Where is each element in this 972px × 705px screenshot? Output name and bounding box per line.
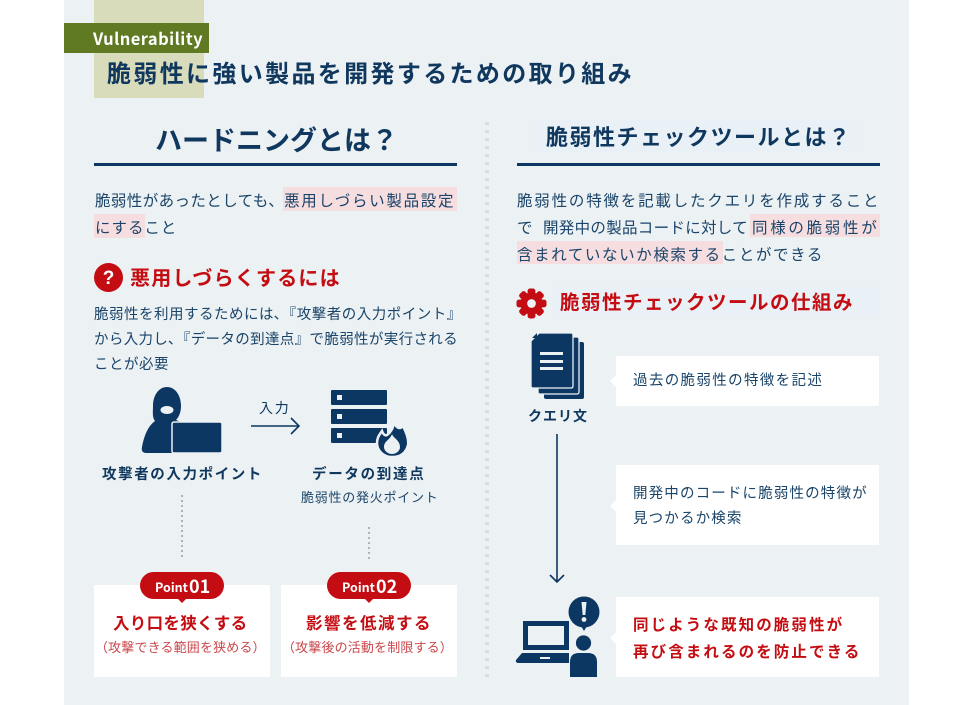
explanation text: 脆弱性を利用するためには､『攻撃者の入力ポイント』 — [94, 307, 462, 323]
arrow: query to result — [550, 434, 564, 584]
label: data destination: データの到達点 — [312, 467, 425, 483]
explanation text: ことが必要 — [94, 357, 169, 373]
subheading background — [552, 287, 879, 318]
caption: restrict post-attack activity: （攻撃後の活動を制限する） — [282, 640, 453, 655]
highlight: line two — [750, 214, 880, 237]
badge: point 02: 02 — [376, 573, 397, 599]
label: attacker input point: 攻撃者の入力ポイント — [102, 467, 263, 483]
arrow label: input: 入力 — [259, 400, 291, 416]
definition text: 含まれていないか検索することができる — [517, 247, 824, 264]
explanation text: から入力し､『データの到達点』で脆弱性が実行される — [94, 332, 458, 348]
definition text: 開発中の製品コードに対して — [543, 220, 748, 237]
badge: point 01: 01 — [189, 573, 210, 599]
heading: check tool: 脆弱性チェックツールとは？ — [546, 125, 852, 150]
subheading: how to make it hard to abuse: 悪用しづらくするには — [130, 268, 341, 290]
callout text: 再び含まれるのを防止できる — [633, 644, 862, 661]
icon: question: ? — [103, 268, 114, 289]
definition text: 同様の脆弱性が — [752, 220, 879, 237]
header: Vulnerability tag: Vulnerability — [93, 26, 203, 50]
heading: reduce impact: 影響を低減する — [306, 615, 432, 633]
callout text: 同じような既知の脆弱性が — [633, 617, 844, 634]
highlight: line two — [94, 214, 145, 238]
heading background — [535, 120, 862, 152]
icon: query documents — [532, 333, 584, 399]
callout: search in code — [616, 465, 879, 545]
badge: point 02: Point — [342, 577, 376, 596]
icon: hooded attacker with laptop — [142, 387, 222, 453]
header: olive square — [94, 0, 204, 98]
label: ignition point: 脆弱性の発火ポイント — [301, 490, 439, 505]
highlight: line three — [517, 241, 723, 264]
callout: prevent recurrence — [616, 597, 879, 677]
icon: server on fire — [331, 390, 408, 456]
subheading: mechanism: 脆弱性チェックツールの仕組み — [560, 292, 854, 314]
definition text: にすること — [95, 220, 177, 237]
card: point 01 — [94, 585, 270, 677]
panel: hardening — [94, 126, 462, 677]
definition text — [95, 192, 455, 237]
callout text — [633, 485, 868, 527]
badge: point 01: Point — [155, 577, 189, 596]
definition text — [517, 192, 880, 264]
badge: point 02 — [327, 572, 411, 603]
icon: laptop and person alert — [516, 596, 600, 677]
dotted connector right — [368, 527, 370, 559]
heading: hardening: ハードニングとは？ — [155, 126, 398, 156]
badge: point 01 — [140, 572, 224, 603]
callout text: 見つかるか検索 — [633, 511, 743, 527]
label: query: クエリ文 — [528, 408, 588, 424]
title: 脆弱性に強い製品を開発するための取り組み — [107, 61, 634, 88]
header: Vulnerability tag — [64, 23, 209, 53]
card: point 02 — [281, 585, 457, 677]
definition text: で — [517, 220, 533, 237]
icon: question — [94, 263, 123, 292]
dotted connector left — [181, 495, 183, 558]
highlight: line one — [283, 187, 457, 211]
callout text: 開発中のコードに脆弱性の特徴が — [633, 486, 868, 502]
icon: gear — [516, 288, 546, 318]
callout text: 過去の脆弱性の特徴を記述 — [633, 373, 823, 389]
callout text — [633, 616, 862, 661]
definition text: 脆弱性があったとしても、悪用しづらい製品設定 — [95, 193, 455, 210]
caption: narrow attack surface: （攻撃できる範囲を狭める） — [95, 640, 266, 655]
panel: vulnerability check tool — [516, 125, 880, 677]
callout: describe past vulnerabilities — [616, 356, 879, 406]
column divider — [485, 122, 489, 678]
heading: narrow the entrance: 入り口を狭くする — [113, 615, 247, 633]
explanation text — [94, 306, 462, 373]
arrow: input — [251, 417, 300, 435]
definition text: 脆弱性の特徴を記載したクエリを作成すること — [517, 193, 880, 210]
